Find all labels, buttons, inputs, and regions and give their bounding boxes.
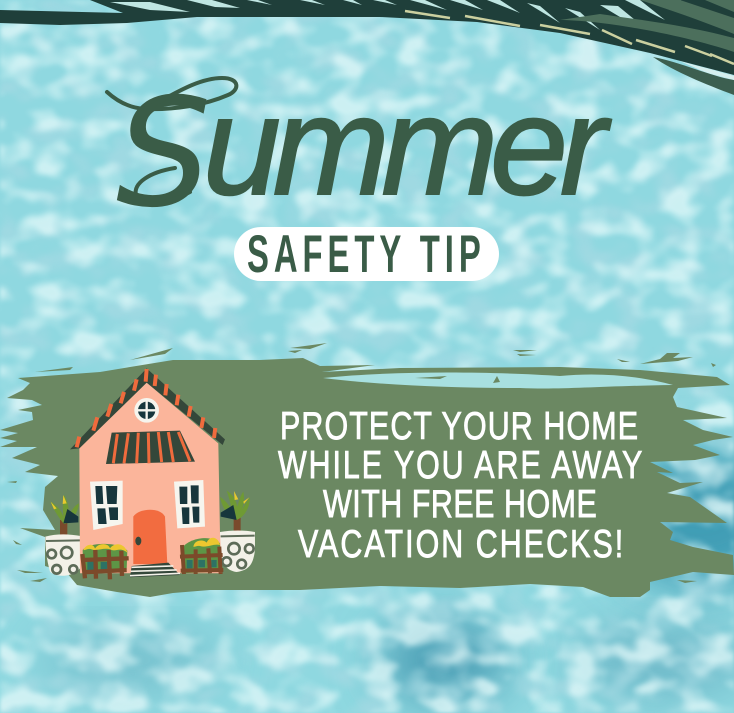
striped awning <box>106 431 195 464</box>
left window <box>90 481 123 530</box>
right pot <box>220 530 255 572</box>
left palm plant <box>51 495 79 535</box>
roof <box>70 368 225 449</box>
title: Summer: S <box>116 67 211 241</box>
right palm plant <box>220 491 250 532</box>
message text: WITH FREE HOME <box>323 482 597 526</box>
message text: PROTECT YOUR HOME <box>280 404 638 448</box>
round attic window <box>134 398 159 423</box>
decorative swash loops on the S <box>107 78 236 203</box>
right flower box <box>180 538 223 574</box>
badge: safety tip: SAFETY TIP <box>247 225 481 284</box>
left pot <box>45 534 81 576</box>
palm frond across the top <box>0 0 734 95</box>
message text: VACATION CHECKS! <box>298 522 623 566</box>
front steps <box>130 563 180 577</box>
brush stroke panel <box>0 343 734 597</box>
right window <box>174 480 205 528</box>
door <box>133 510 167 564</box>
title: Summer: ummer <box>203 67 612 224</box>
message text <box>278 404 642 566</box>
house body <box>79 383 222 573</box>
icon: house with planters <box>45 368 255 579</box>
message text: WHILE YOU ARE AWAY <box>278 443 642 487</box>
left flower box <box>82 544 129 579</box>
